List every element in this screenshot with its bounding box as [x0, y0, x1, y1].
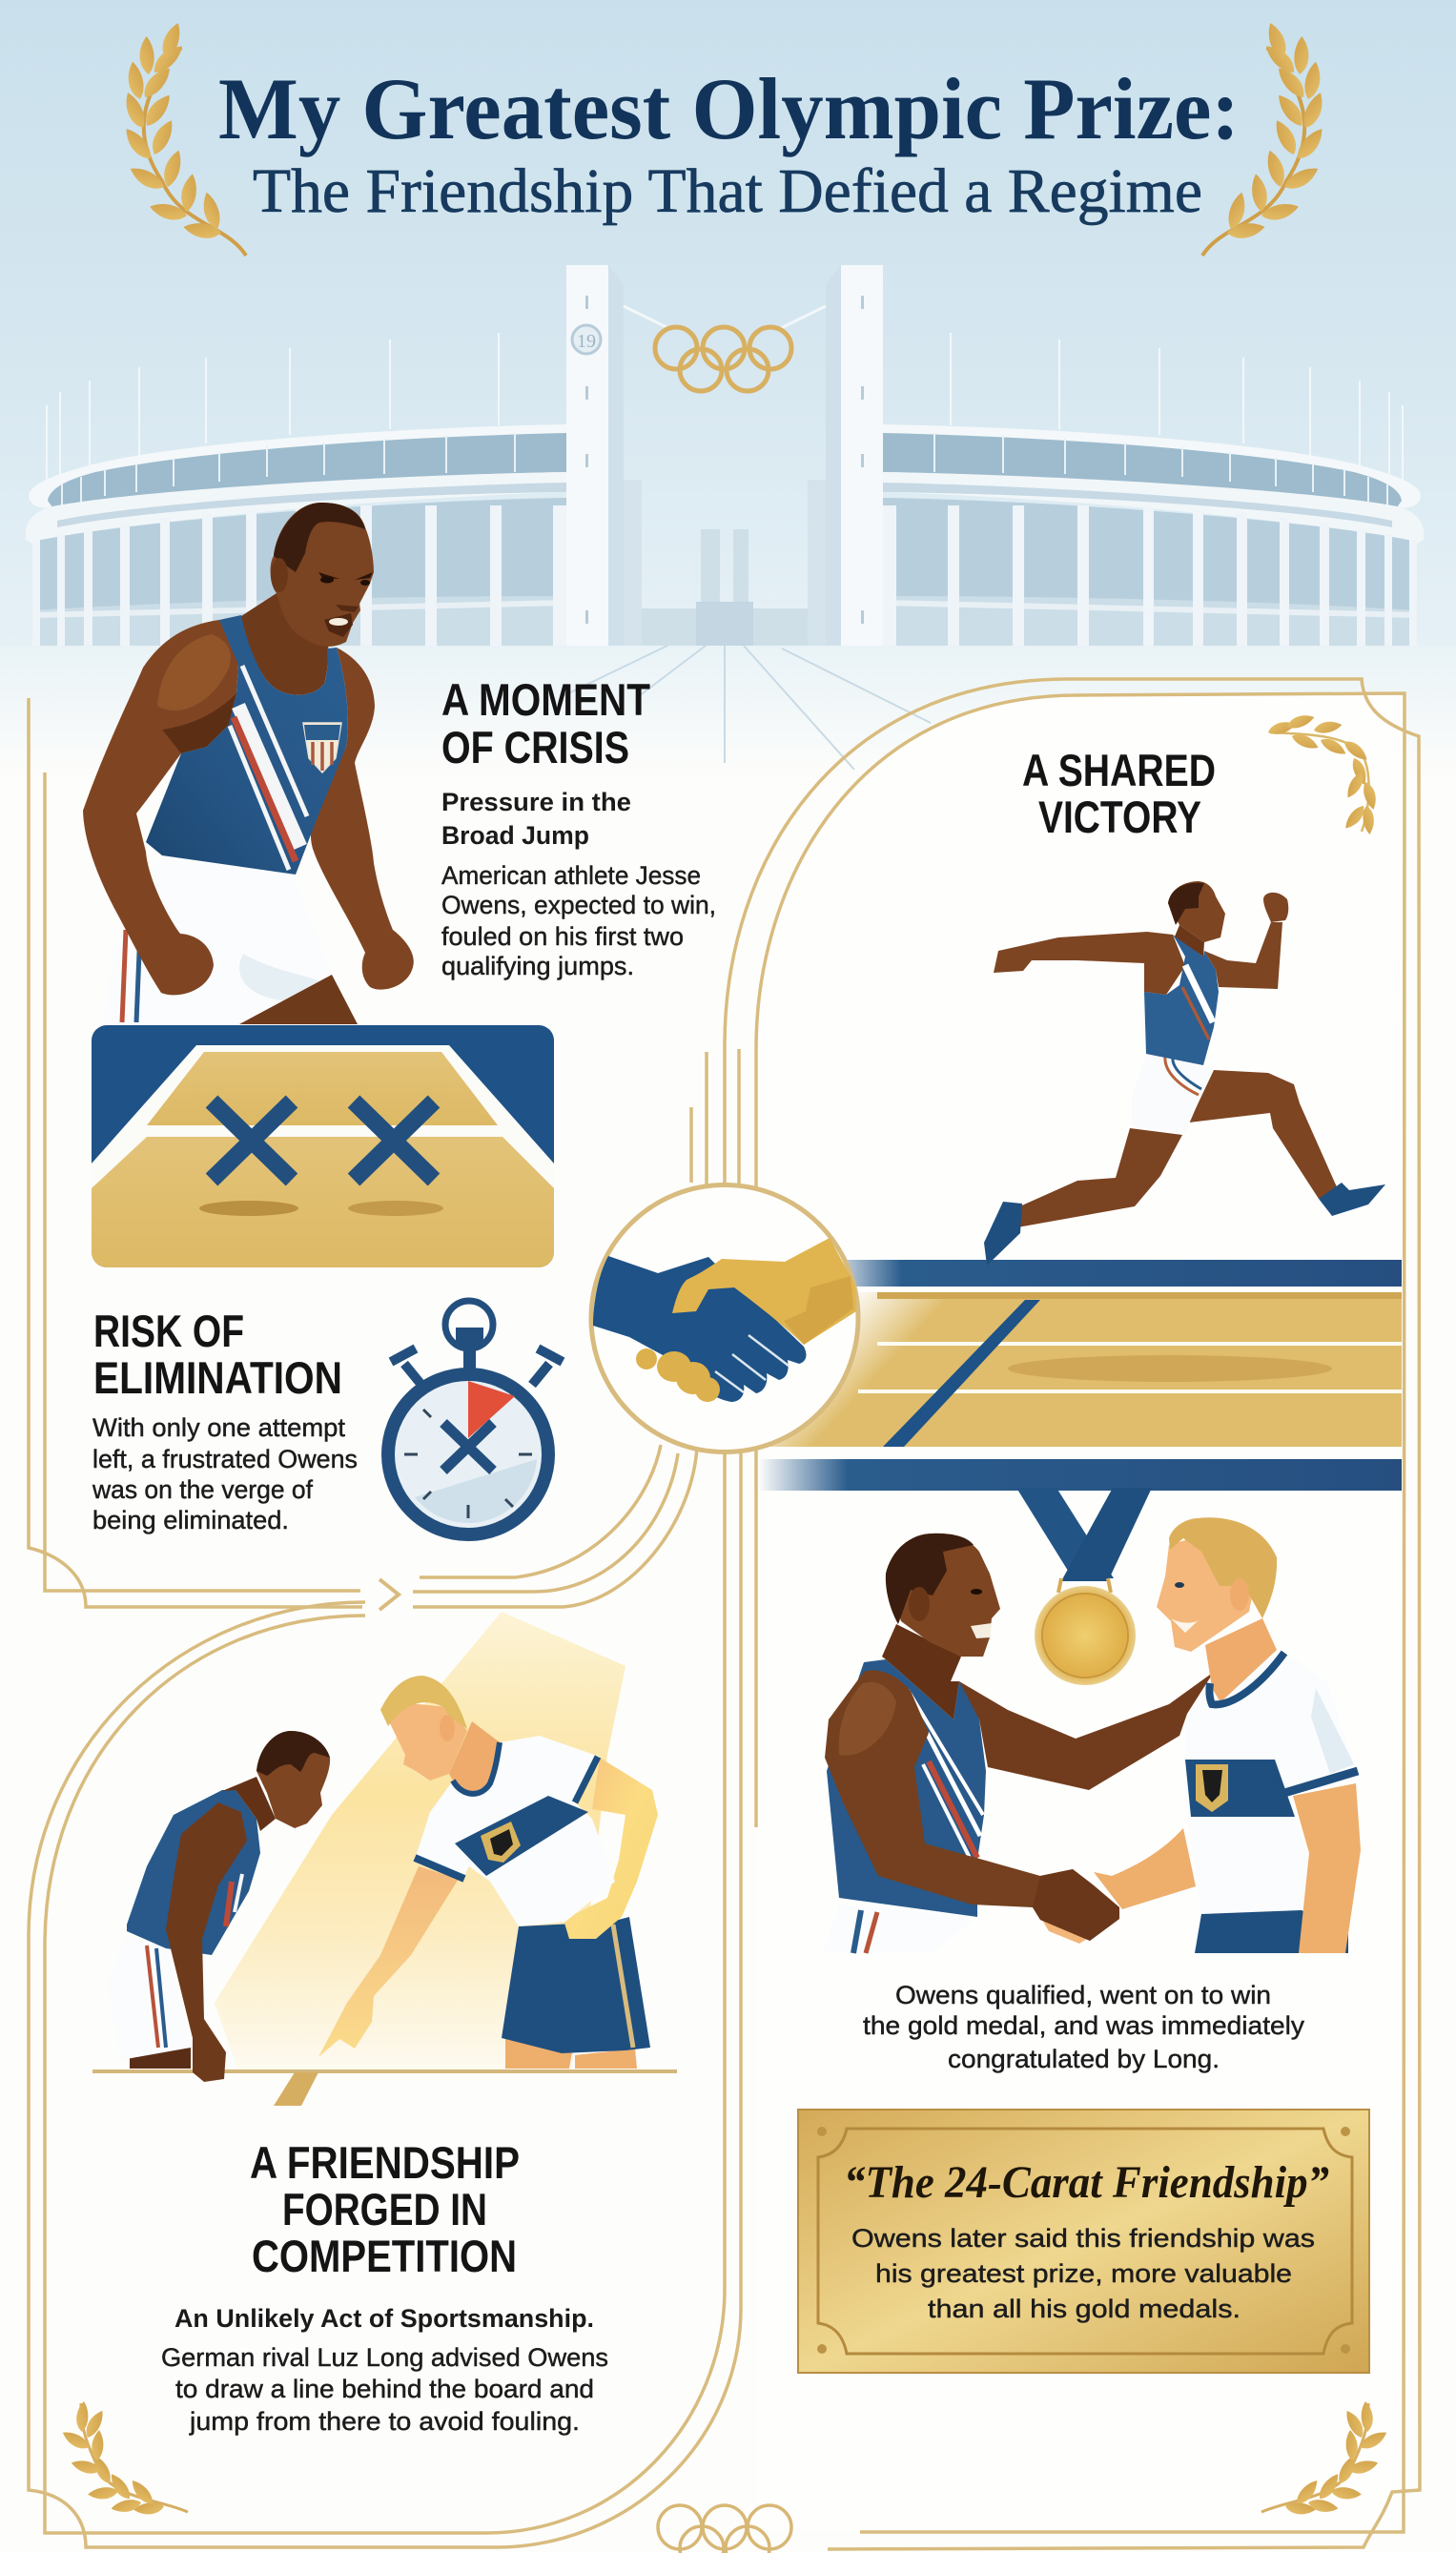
Long neck and head: [449, 1721, 500, 1796]
Owens neck and head: [882, 1624, 961, 1719]
gold frame: friendship forged: [29, 1450, 741, 2547]
text: a friendship forged in competition: FORGED IN: [282, 2184, 487, 2234]
take-off board: [274, 2072, 318, 2106]
plaque body: his greatest prize, more valuable: [875, 2259, 1292, 2288]
distant central structure: [641, 529, 809, 646]
stadium left half: [26, 265, 668, 646]
shorts: [1132, 1056, 1213, 1133]
text: risk of elimination: With only one attempt: [92, 1413, 345, 1442]
Long hand: [1040, 1907, 1092, 1944]
plaque: the 24-carat friendship: [798, 2110, 1369, 2373]
Long shorts: [502, 1917, 650, 2053]
text: a shared victory: A SHARED: [1022, 745, 1216, 795]
tower emblem: [572, 325, 601, 354]
title: My Greatest Olympic Prize:: [218, 60, 1240, 157]
text: risk of elimination: [92, 1306, 358, 1534]
text: congratulated by Long: Owens qualified, went on to win: [895, 1981, 1271, 2009]
Long forearm: [1094, 1828, 1196, 1909]
text: a friendship forged in competition: COMPETITION: [252, 2231, 517, 2281]
ribbon and gold medal: [1016, 1488, 1152, 1685]
shorts: [105, 856, 358, 1025]
panel: a shared victory background: [756, 693, 1405, 2532]
text: a friendship forged in competition: [161, 2137, 608, 2436]
eagle badge: [1196, 1764, 1228, 1812]
Long collar: [453, 1742, 500, 1794]
gold frame: moment of crisis: [29, 698, 697, 1607]
rear shoe: [984, 1202, 1022, 1266]
arrow: chevron to next panel: [379, 1579, 399, 1610]
rear leg: [1015, 1128, 1182, 1227]
Owens singlet: [127, 1790, 260, 1955]
text: a moment of crisis: A MOMENT: [441, 674, 650, 725]
Owens arm: [166, 1802, 247, 2082]
tower emblem: 19: [577, 331, 596, 352]
sky background: [0, 0, 1456, 649]
text: a friendship forged in competition: An Unlikely Act of Sportsmanship.: [174, 2304, 594, 2333]
gold fingers: [636, 1349, 720, 1402]
plaque body: than all his gold medals.: [928, 2295, 1241, 2323]
text: a friendship forged in competition: A FRIENDSHIP: [250, 2137, 520, 2188]
eagle badge: [481, 1822, 521, 1863]
icon: stopwatch: [388, 1301, 563, 1534]
text: a friendship forged in competition: to draw a line behind the board and: [175, 2375, 594, 2403]
icon: central handshake medallion: [591, 1184, 858, 1452]
plaque body: [851, 2224, 1315, 2323]
left arm: [83, 620, 238, 995]
text: congratulated by Long: the gold medal, and was immediately: [863, 2011, 1305, 2040]
panel: broad jump pit with two fouls: [92, 1025, 554, 1267]
icon: small laurel bottom right: [1261, 2401, 1389, 2516]
ground and page background: [0, 646, 1456, 2553]
figure: Jesse Owens in crisis: [83, 503, 414, 1025]
Owens legs: [130, 2048, 191, 2069]
text: congratulated by Long: [863, 1981, 1305, 2073]
text: a friendship forged in competition: jump from there to avoid fouling.: [189, 2407, 580, 2436]
text: a moment of crisis: OF CRISIS: [441, 722, 629, 772]
icon: left laurel: [120, 20, 246, 256]
Long shirt: [415, 1736, 615, 1926]
text: risk of elimination: was on the verge of: [92, 1475, 313, 1504]
plaque heading: “The 24-Carat Friendship”: [844, 2157, 1329, 2208]
gold frame: shared victory: [691, 679, 1420, 2549]
Owens shorts: [108, 1936, 191, 2060]
figure: Long advises Owens: [92, 1612, 677, 2106]
Long shorts: [1195, 1910, 1348, 1953]
icon: small laurel bottom left: [60, 2401, 188, 2516]
title: [218, 60, 1240, 226]
Owens arm around Long: [959, 1672, 1214, 1790]
text: risk of elimination: left, a frustrated Owens: [92, 1445, 358, 1473]
text: a moment of crisis: Broad Jump: [441, 821, 589, 850]
icon: foul mark two: [354, 1101, 434, 1180]
front shoe: [1319, 1183, 1385, 1216]
figure: Owens running: [984, 881, 1385, 1266]
olympic rings: [655, 327, 791, 391]
Long shirt: [1185, 1653, 1356, 1914]
singlet: [146, 615, 348, 875]
stadium illustration: [26, 265, 1424, 646]
plaque body: Owens later said this friendship was: [851, 2224, 1315, 2253]
text: congratulated by Long: congratulated by Long.: [948, 2045, 1220, 2073]
Long legs: [505, 2039, 572, 2069]
Long collar: [1209, 1653, 1284, 1704]
text: a shared victory: [1022, 745, 1216, 842]
light beam: [215, 1612, 625, 2070]
icon: foul mark one: [212, 1101, 292, 1180]
icon: bottom olympic rings: [658, 2505, 791, 2553]
text: risk of elimination: ELIMINATION: [93, 1352, 342, 1403]
ground line: [92, 2069, 677, 2073]
text: a moment of crisis: [441, 674, 716, 980]
text: a friendship forged in competition: German rival Luz Long advised Owens: [161, 2343, 608, 2372]
Long neck and head: [1205, 1618, 1277, 1702]
Owens singlet: [827, 1659, 986, 1917]
Long right arm: [564, 1758, 658, 1939]
text: a moment of crisis: Owens, expected to win,: [441, 891, 716, 919]
text: a moment of crisis: American athlete Jesse: [441, 861, 701, 890]
torso: [1144, 935, 1219, 1065]
figure: Owens and Long congratulate: [823, 1517, 1361, 1953]
track in shared victory panel: [744, 1260, 1402, 1491]
neck and head: [1175, 925, 1204, 957]
title: The Friendship That Defied a Regime: [253, 156, 1202, 226]
Long right arm: [1293, 1783, 1361, 1953]
shield badge: [303, 723, 341, 772]
neck and head: [238, 593, 329, 695]
text: a moment of crisis: Pressure in the: [441, 788, 631, 816]
blue arm and hand: [593, 1256, 806, 1402]
text: risk of elimination: being eliminated.: [92, 1506, 289, 1534]
text: a moment of crisis: qualifying jumps.: [441, 952, 634, 980]
Owens neck and head: [222, 1777, 276, 1831]
text: a shared victory: VICTORY: [1038, 792, 1201, 842]
rear arm: [994, 932, 1185, 995]
Long pointing arm: [318, 1866, 459, 2057]
front leg: [1189, 1070, 1338, 1199]
text: a moment of crisis: fouled on his first two: [441, 922, 684, 951]
forward arm: [1204, 922, 1282, 989]
icon: small laurel top right: [1266, 711, 1379, 834]
right arm: [311, 648, 414, 990]
stadium right half: [781, 265, 1424, 646]
Owens upper arm and forearm: [825, 1670, 1119, 1941]
Owens shorts: [823, 1904, 977, 1953]
gold arm and hand: [672, 1238, 856, 1345]
icon: right laurel: [1202, 20, 1328, 256]
text: risk of elimination: RISK OF: [93, 1306, 244, 1356]
